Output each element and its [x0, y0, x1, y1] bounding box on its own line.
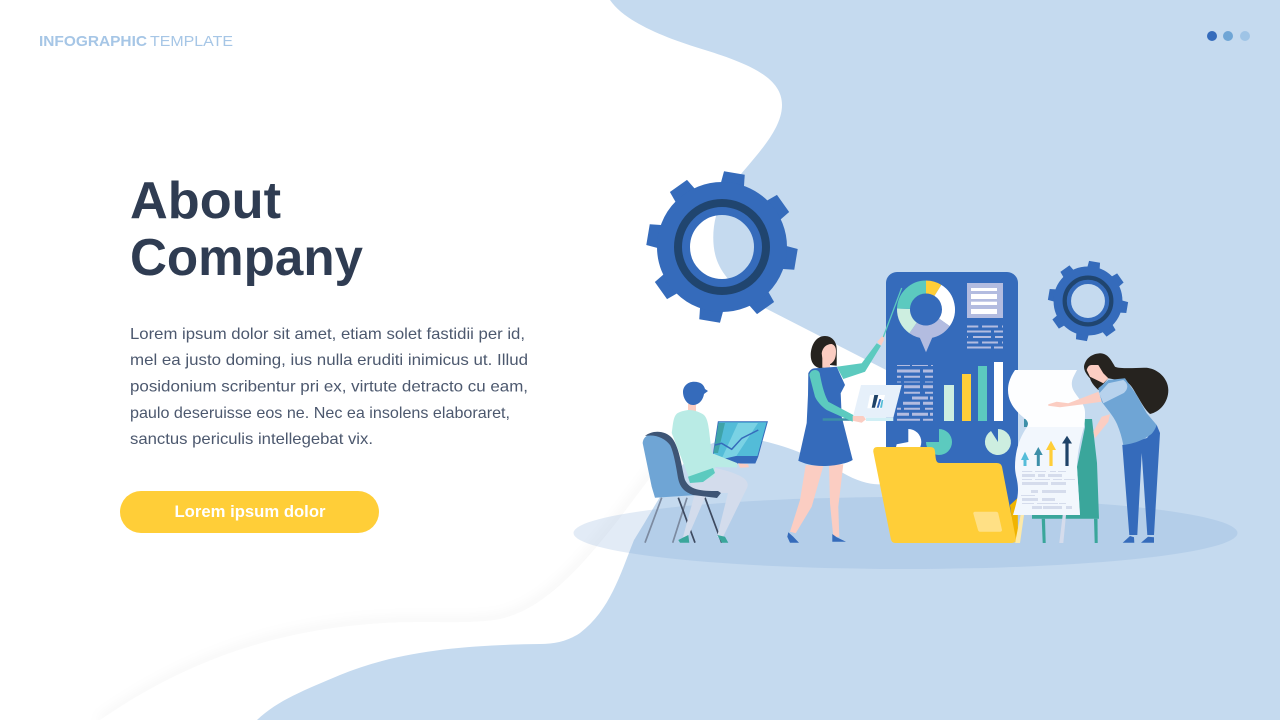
legs	[683, 468, 748, 537]
tablet	[823, 385, 902, 421]
paper curled top	[1008, 370, 1085, 427]
shoes	[1123, 536, 1154, 543]
donut chart with pointer	[903, 287, 948, 352]
title	[130, 172, 363, 287]
hand	[738, 463, 749, 468]
pants	[1122, 425, 1160, 535]
background: blue wave shape	[257, 0, 1280, 720]
shoes	[678, 535, 728, 543]
title: Company	[130, 229, 363, 287]
arrows	[1021, 436, 1072, 466]
chair legs	[645, 498, 722, 543]
figure: standing woman with tablet	[787, 288, 902, 543]
front arm	[1048, 392, 1102, 407]
shoes	[787, 532, 846, 543]
hair	[811, 336, 837, 368]
shirt	[672, 410, 737, 480]
text lines: right block	[967, 326, 1003, 348]
pagination dots	[1207, 31, 1250, 41]
legs	[790, 464, 843, 537]
body text: posidonium scribentur pri ex, virtute detracto cu eam,	[130, 378, 528, 396]
background: soft shadow curve	[80, 458, 720, 720]
folder	[873, 447, 1018, 543]
header label	[39, 33, 233, 50]
figure: seated man with laptop	[643, 382, 767, 543]
pie charts	[896, 429, 1011, 455]
chair	[643, 433, 697, 498]
figure: woman at flipchart	[1048, 353, 1168, 543]
body text: sanctus periculis intellegebat vix.	[130, 431, 373, 448]
text lines on paper	[1021, 472, 1075, 508]
face	[822, 344, 836, 368]
sleeve	[1099, 380, 1127, 403]
ground ellipse	[574, 497, 1238, 569]
header label: INFOGRAPHIC	[39, 33, 147, 50]
header label: TEMPLATE	[150, 33, 233, 50]
paper sheet	[1013, 427, 1084, 515]
body text: mel ea justo doming, ius nulla eruditi inimicus ut. Illud	[130, 352, 528, 369]
back arm	[1093, 414, 1110, 438]
bar chart	[944, 362, 1003, 421]
button: Lorem ipsum dolor	[174, 503, 326, 521]
hair	[1084, 353, 1168, 414]
laptop	[712, 422, 767, 463]
title: About	[130, 172, 281, 230]
panel: dashboard board	[886, 272, 1018, 517]
icon: small gear	[1048, 261, 1128, 341]
body text: paulo deseruisse eos ne. Nec ea insolens elaboraret,	[130, 405, 510, 422]
face	[1087, 365, 1108, 383]
dress	[798, 367, 853, 466]
raised arm and pointer	[837, 288, 902, 379]
button	[120, 491, 379, 533]
head	[683, 382, 708, 412]
flipchart easel	[1008, 370, 1099, 543]
shirt	[1098, 378, 1157, 445]
text lines: left block	[897, 366, 933, 420]
body text: Lorem ipsum dolor sit amet, etiam solet fastidii per id,	[130, 326, 525, 343]
icon: large gear	[646, 171, 798, 323]
arm holding tablet	[809, 370, 853, 422]
document card	[967, 283, 1003, 318]
body text	[130, 326, 528, 448]
